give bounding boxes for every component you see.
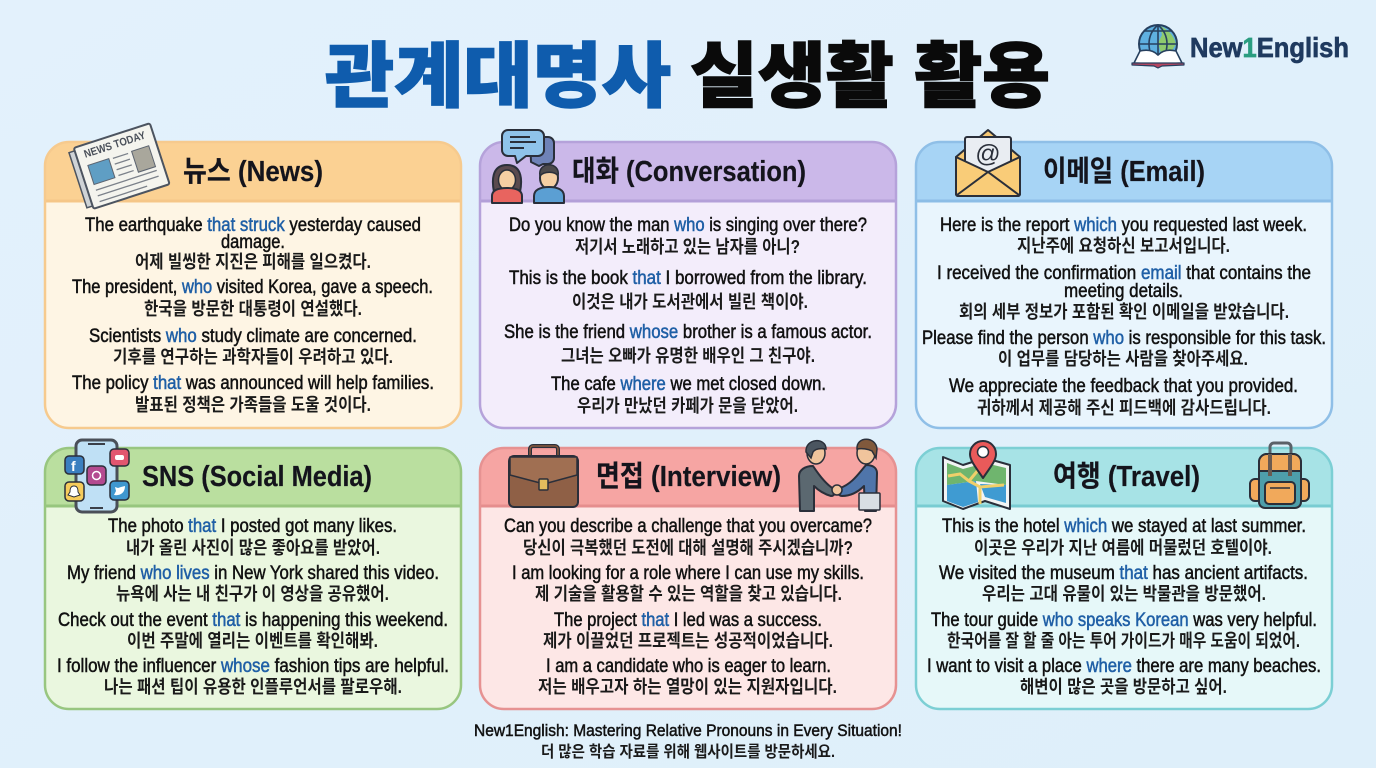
logo: New1English: [1132, 25, 1349, 68]
title: 관계대명사: [325, 38, 671, 117]
sentence 3: [543, 610, 833, 651]
sentence 2: 회의 세부 정보가 포함된 확인 이메일을 받았습니다.: [959, 302, 1289, 322]
sentence 1: 어제 빌씽한 지진은 피해를 일으켰다.: [135, 252, 371, 272]
heading: news: 뉴스 (News): [183, 156, 323, 188]
sentence 2: 한국을 방문한 대통령이 연설했다.: [144, 299, 362, 319]
sentence 2: meeting details.: [1064, 281, 1183, 302]
sentence 3: The tour guide who speaks Korean was very helpful.: [931, 610, 1317, 631]
sentence 3: [89, 326, 417, 367]
footer text: 더 많은 학습 자료를 위해 웹사이트를 방문하세요.: [541, 743, 835, 761]
sentence 4: 발표된 정책은 가족들을 도울 것이다.: [135, 395, 371, 415]
sentence 2: We visited the museum that has ancient artifacts.: [939, 563, 1308, 584]
sentence 1: The photo that I posted got many likes.: [108, 516, 397, 537]
sentence 1: 지난주에 요청하신 보고서입니다.: [1017, 236, 1230, 256]
sentence 4: The cafe where we met closed down.: [551, 374, 826, 395]
sentence 3: 기후를 연구하는 과학자들이 우려하고 있다.: [113, 347, 393, 367]
icon: envelope: [956, 130, 1020, 196]
sentence 4: [538, 656, 837, 697]
sentence 2: [937, 263, 1311, 322]
panel: travel: [916, 441, 1332, 709]
sentence 2: I am looking for a role where I can use my skills.: [512, 563, 864, 584]
sentence 3: [922, 328, 1326, 369]
sentence 1: The earthquake that struck yesterday caused: [85, 215, 421, 236]
sentence 2: This is the book that I borrowed from the library.: [509, 268, 867, 289]
sentence 1: Here is the report which you requested last week.: [940, 215, 1307, 236]
sentence 1: [108, 516, 397, 558]
sentence 1: This is the hotel which we stayed at last summer.: [942, 516, 1306, 537]
sentence 2: [509, 268, 867, 312]
sentence 3: 한국어를 잘 할 줄 아는 투어 가이드가 매우 도움이 되었어.: [947, 631, 1300, 651]
icon: map with pin: [943, 441, 1010, 509]
title: 실생활 활용: [690, 38, 1050, 117]
sentence 1: damage.: [221, 232, 285, 253]
panel: email: [916, 130, 1332, 428]
icon: envelope: @: [975, 140, 1001, 168]
sentence 1: 내가 올린 사진이 많은 좋아요를 받았어.: [126, 538, 380, 558]
sentence 1: 당신이 극복했던 도전에 대해 설명해 주시겠습니까?: [523, 538, 853, 558]
sentence 3: [504, 322, 872, 366]
heading: social media: SNS (Social Media): [142, 461, 372, 493]
sentence 4: The policy that was announced will help families.: [72, 373, 434, 394]
panel: interview: [480, 439, 896, 709]
sentence 3: 그녀는 오빠가 유명한 배우인 그 친구야.: [561, 346, 815, 366]
sentence 1: 이곳은 우리가 지난 여름에 머물렀던 호텔이야.: [974, 538, 1272, 558]
sentence 4: [551, 374, 826, 416]
heading: interview: 면접 (Interview): [596, 460, 781, 493]
sentence 4: [72, 373, 434, 415]
icon: phone with social apps: [65, 440, 129, 512]
sentence 3: She is the friend whose brother is a famous actor.: [504, 322, 872, 343]
panel: news: [45, 123, 461, 428]
sentence 3: Check out the event that is happening this weekend.: [58, 610, 448, 631]
sentence 4: 나는 패션 팁이 유용한 인플루언서를 팔로우해.: [104, 677, 402, 697]
icon: handshake: [799, 439, 880, 511]
title: [325, 38, 1050, 117]
icon: newspaper: [68, 123, 170, 211]
sentence 1: [509, 215, 867, 257]
sentence 2: 제 기술을 활용할 수 있는 역할을 찾고 있습니다.: [535, 584, 842, 604]
sentence 1: Can you describe a challenge that you overcame?: [504, 516, 872, 537]
sentence 3: Please find the person who is responsible for this task.: [922, 328, 1326, 349]
sentence 2: [512, 563, 864, 604]
sentence 1: [85, 215, 421, 272]
sentence 4: [949, 376, 1298, 418]
footer text: New1English: Mastering Relative Pronouns in Every Situation!: [474, 721, 902, 740]
sentence 3: [58, 610, 448, 651]
panel: social media: [45, 440, 461, 709]
sentence 3: The project that I led was a success.: [554, 610, 822, 631]
sentence 2: 뉴욕에 사는 내 친구가 이 영상을 공유했어.: [116, 584, 389, 604]
sentence 4: 우리가 만났던 카페가 문을 닫았어.: [577, 396, 798, 416]
sentence 1: [504, 516, 872, 558]
sentence 4: 귀하께서 제공해 주신 피드백에 감사드립니다.: [977, 398, 1271, 418]
icon: backpack: [1250, 443, 1309, 508]
heading: travel: 여행 (Travel): [1053, 460, 1200, 493]
sentence 3: 이번 주말에 열리는 이벤트를 확인해봐.: [127, 631, 378, 651]
sentence 3: 제가 이끌었던 프로젝트는 성공적이었습니다.: [543, 631, 833, 651]
sentence 2: [72, 277, 433, 319]
sentence 3: [931, 610, 1317, 651]
sentence 2: 우리는 고대 유물이 있는 박물관을 방문했어.: [982, 584, 1266, 604]
sentence 4: I want to visit a place where there are many beaches.: [927, 656, 1321, 677]
sentence 1: [942, 516, 1306, 558]
sentence 2: 이것은 내가 도서관에서 빌린 책이야.: [572, 292, 808, 312]
panel: conversation: [480, 130, 896, 428]
logo: New1English: New1English: [1190, 32, 1349, 63]
sentence 4: [927, 656, 1321, 697]
sentence 2: [67, 563, 439, 604]
sentence 2: My friend who lives in New York shared this video.: [67, 563, 439, 584]
sentence 4: 해변이 많은 곳을 방문하고 싶어.: [1020, 677, 1227, 697]
heading: email: 이메일 (Email): [1043, 155, 1205, 188]
sentence 4: I am a candidate who is eager to learn.: [546, 656, 831, 677]
sentence 2: I received the confirmation email that contains the: [937, 263, 1311, 284]
sentence 2: The president, who visited Korea, gave a speech.: [72, 277, 433, 298]
sentence 1: Do you know the man who is singing over there?: [509, 215, 867, 236]
icon: newspaper: NEWS TODAY: [83, 129, 148, 161]
sentence 4: I follow the influencer whose fashion tips are helpful.: [57, 656, 449, 677]
icon: briefcase: [509, 446, 578, 507]
sentence 4: We appreciate the feedback that you provided.: [949, 376, 1298, 397]
icon: conversation people: [492, 130, 564, 203]
icon: phone with social apps: f: [71, 458, 76, 474]
sentence 3: 이 업무를 담당하는 사람을 찾아주세요.: [998, 349, 1248, 369]
sentence 4: 저는 배우고자 하는 열망이 있는 지원자입니다.: [538, 677, 837, 697]
sentence 2: [939, 563, 1308, 604]
sentence 4: [57, 656, 449, 697]
sentence 1: 저기서 노래하고 있는 남자를 아니?: [575, 237, 800, 257]
sentence 1: [940, 215, 1307, 256]
footer text: [474, 721, 902, 761]
heading: conversation: 대화 (Conversation): [572, 155, 806, 188]
sentence 3: Scientists who study climate are concerned.: [89, 326, 417, 347]
